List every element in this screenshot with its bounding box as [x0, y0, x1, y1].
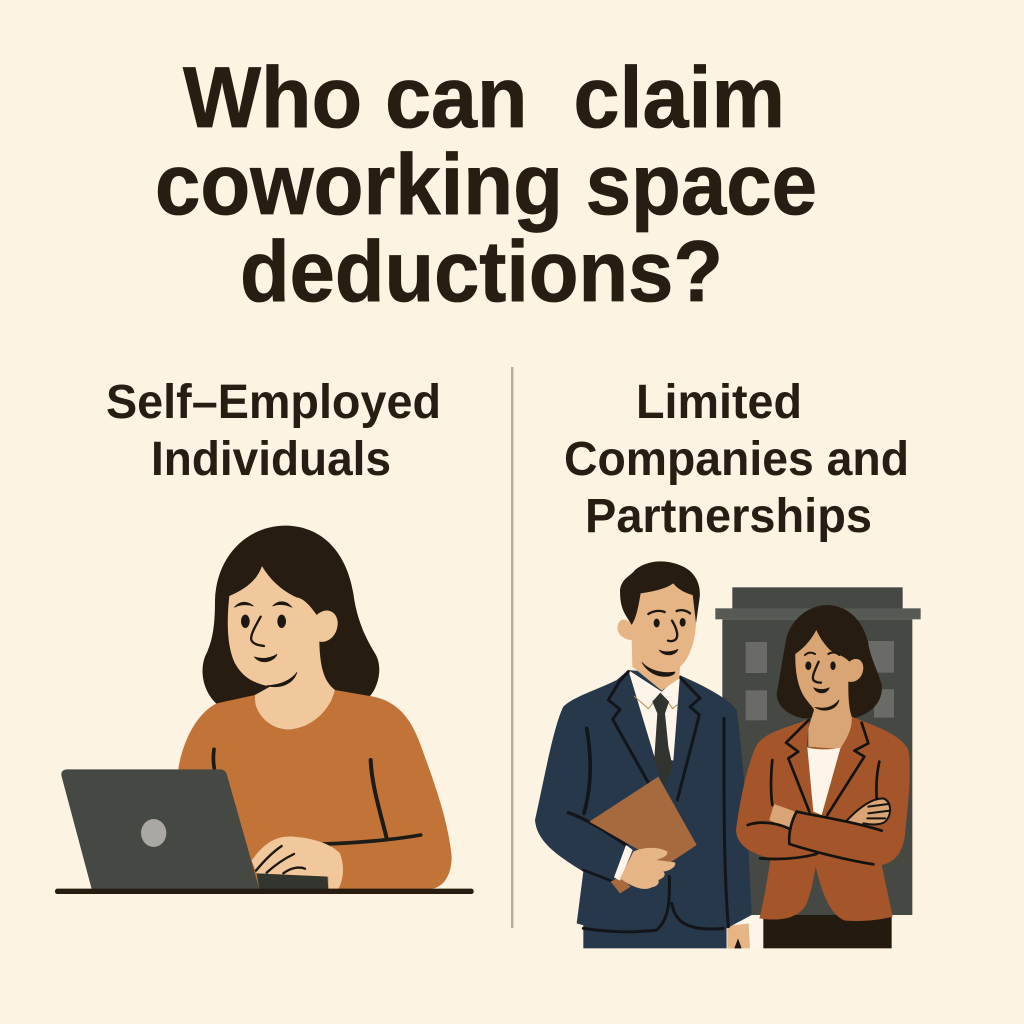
heading: limited companies and partnerships: Companies and [564, 433, 909, 486]
heading: limited companies and partnerships: Limited [636, 376, 802, 429]
man: hair [620, 561, 700, 625]
woman: skirt [763, 915, 892, 948]
man: hand on folder [620, 848, 675, 889]
woman: facial features [805, 652, 839, 710]
woman: hair [777, 605, 882, 718]
man: neck and face [617, 583, 696, 691]
desk [55, 889, 474, 894]
man: folder [589, 777, 697, 893]
sweater [178, 690, 452, 889]
woman: white top [807, 747, 841, 815]
keyboard [257, 873, 328, 889]
office building [715, 587, 921, 915]
woman: right hand [847, 798, 890, 825]
title: Who can claim [183, 50, 785, 146]
illustration: business people and office building [535, 561, 921, 948]
man: trousers [583, 925, 727, 948]
man: shirt cuff [614, 845, 633, 881]
heading: self-employed individuals: Individuals [151, 433, 391, 486]
title: deductions? [240, 224, 723, 320]
heading: limited companies and partnerships: Partnerships [585, 490, 872, 543]
heading: limited companies and partnerships [564, 376, 909, 543]
woman: left hand [769, 804, 797, 829]
hair [202, 526, 379, 704]
man: suit jacket [535, 670, 752, 932]
illustration: self-employed woman at laptop [55, 526, 474, 894]
man: tie [652, 693, 673, 787]
facial features [234, 602, 297, 687]
title [155, 50, 817, 320]
title: coworking space [155, 137, 817, 233]
man: collar line [634, 696, 677, 709]
woman: jacket [736, 717, 910, 921]
man: lapels and suit lines [568, 672, 728, 932]
heading: self-employed individuals: Self–Employed [106, 376, 441, 429]
heading: self-employed individuals [106, 376, 441, 486]
laptop logo [141, 819, 166, 847]
woman: folded forearm [789, 812, 905, 865]
finger lines [256, 846, 305, 873]
laptop [61, 769, 259, 889]
hand [252, 836, 343, 889]
man: shirt [628, 670, 680, 761]
sweater fold lines [213, 749, 421, 844]
man: cuff and lower hand [727, 915, 761, 948]
man: facial features [642, 610, 690, 676]
face and neck [228, 566, 338, 729]
woman: jacket lines [748, 720, 890, 864]
woman: neck and face [795, 630, 863, 749]
